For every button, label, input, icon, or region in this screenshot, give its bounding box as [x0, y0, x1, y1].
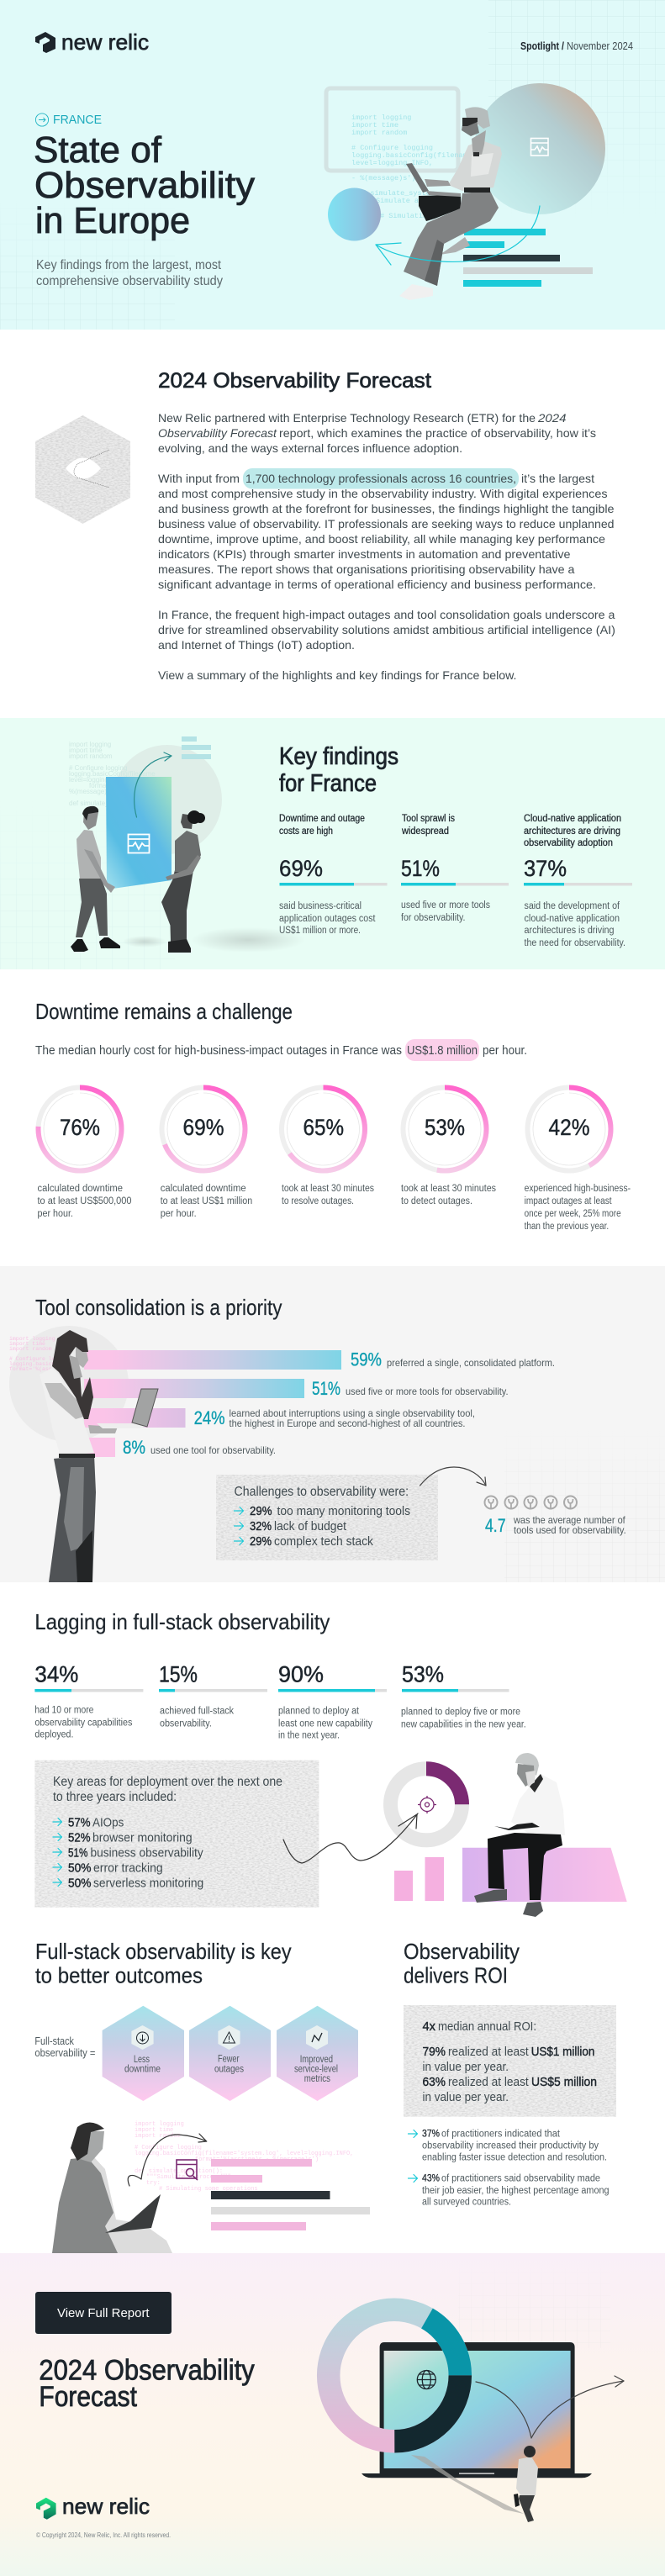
finding: cloud-native	[524, 814, 632, 948]
callout: key deployment areas	[34, 1760, 319, 1908]
faded code: format='%(asc	[9, 1366, 52, 1372]
sentence with highlight: The median hourly cost for high-business-impact outages in France was	[35, 1043, 402, 1058]
finding: downtime costs: said business-critical	[279, 901, 362, 911]
faded code: logging.basicConfig	[9, 1361, 71, 1367]
hexagon: fewer outages: outages	[214, 2065, 244, 2075]
icon: search window	[177, 2160, 198, 2180]
subtitle: comprehensive observability study	[36, 274, 223, 288]
donut stat: 69%: 69%	[183, 1115, 224, 1140]
man reading	[474, 1753, 565, 1917]
stat: 34%: deployed.	[34, 1730, 73, 1740]
body text: it’s the largest	[521, 472, 594, 485]
faded code: import logging	[9, 1336, 55, 1342]
callout: key deployment areas: 50%	[68, 1876, 91, 1890]
finding: tool sprawl: used five or more tools	[401, 900, 490, 911]
title: Observability	[34, 165, 255, 206]
hexagon: less downtime	[103, 2006, 184, 2101]
bullet: productivity	[409, 2130, 607, 2163]
heading: for France	[279, 770, 377, 797]
faded code	[135, 2121, 353, 2193]
stat: 90%	[278, 1661, 387, 1740]
donut stat: 76%: 76%	[60, 1115, 100, 1140]
icons: wrenches	[484, 1497, 577, 1508]
bullet: job easier: all surveyed countries.	[422, 2198, 511, 2208]
faded code: %(message)s')	[69, 788, 113, 795]
code window: import random	[351, 129, 407, 137]
heading: Key findings	[279, 743, 398, 770]
wavy arrow	[283, 1813, 418, 1863]
finding: tool sprawl: 51%	[401, 856, 440, 881]
faded code: import time	[135, 2127, 173, 2134]
callout: median ROI: in value per year.	[422, 2060, 509, 2074]
donut stat: 42%	[525, 1088, 631, 1232]
heading: Tool consolidation is a priority	[35, 1295, 282, 1320]
code window: - %(message)s')	[351, 174, 416, 182]
callout: challenges: too many monitoring tools	[277, 1504, 410, 1518]
callout: key deployment areas: Key areas for deployment over the next one	[53, 1775, 282, 1789]
callout: median ROI: 63%	[422, 2075, 446, 2089]
bar chart: 51%	[312, 1378, 340, 1399]
heading: to better outcomes	[35, 1962, 203, 1987]
gradient circle large	[474, 83, 605, 214]
hexagon: improved service-level metrics: metrics	[304, 2074, 330, 2084]
illustration: woman with laptop	[40, 1330, 158, 1582]
finding: cloud-native: the need for observability.	[525, 938, 625, 948]
body text: View a summary of the highlights and key findings for France below.	[158, 668, 516, 682]
heading: Full-stack observability is key	[35, 1939, 292, 1964]
code window: logging.basicConfig(filename=	[351, 151, 476, 160]
heading	[279, 743, 398, 797]
donut stat: 65%: took at least 30 minutes	[282, 1184, 374, 1194]
stat: 34%: 34%	[34, 1661, 78, 1687]
sentence with highlight	[35, 1039, 527, 1061]
finding: downtime costs: Downtime and outage	[279, 814, 365, 824]
faded code: import random	[135, 2133, 181, 2140]
donut stat: 65%: to resolve outages.	[282, 1196, 354, 1206]
finding: cloud-native: observability adoption	[524, 838, 613, 848]
donut stat: 76%	[37, 1088, 131, 1219]
faded code: # Simulating some operations	[159, 2186, 258, 2193]
donut stat: 53%: to detect outages.	[401, 1196, 472, 1206]
donut stat: 76%: per hour.	[37, 1209, 73, 1219]
donut ring	[329, 2309, 460, 2441]
faded code: level=logging.INFO,	[69, 776, 128, 784]
finding: cloud-native: cloud-native application	[525, 914, 620, 924]
callout: key deployment areas: browser monitoring	[92, 1830, 193, 1845]
gradient panel	[106, 777, 172, 889]
hexagon: improved service-level metrics: Improved	[300, 2055, 333, 2065]
bar chart: 8%	[123, 1437, 145, 1458]
donut stat: 69%: per hour.	[161, 1209, 197, 1219]
donut stat: 42%: experienced high-business-	[525, 1184, 631, 1194]
faded code: # Configure logging	[135, 2145, 202, 2151]
heading: Forecast	[39, 2381, 137, 2413]
finding: downtime costs: costs are high	[279, 826, 333, 837]
finding: cloud-native: architectures are driving	[524, 826, 620, 837]
body text: significant advantage in terms of operational efficiency and business performance.	[158, 578, 596, 591]
bar chart: the highest in Europe and second-highest of all countries.	[229, 1417, 466, 1429]
bullet: job easier: their job easier, the highest percentage among	[422, 2186, 609, 2196]
callout: median ROI: median annual ROI:	[438, 2019, 536, 2034]
faded code: # Configure logging	[69, 764, 127, 772]
stat: 53%	[401, 1661, 526, 1730]
donut stat: 42%: 42%	[548, 1115, 590, 1140]
code window: def simulate_system	[353, 189, 435, 198]
finding: cloud-native: Cloud-native application	[524, 814, 621, 824]
heading: Observability	[404, 1939, 520, 1964]
country tag: France: FRANCE	[53, 113, 102, 127]
faded code: import time	[69, 747, 103, 754]
body text: report, which examines the practice of observability, how it’s	[279, 426, 596, 440]
stat: 15%: achieved full-stack	[160, 1707, 234, 1717]
panel: tool consolidation	[0, 1266, 665, 1582]
faded code: import random	[69, 752, 113, 760]
body text: indicators (KPIs) through smarter investments in automation and preventative	[158, 547, 571, 561]
callout: challenges: lack of budget	[274, 1519, 347, 1533]
stat: 15%: 15%	[159, 1661, 198, 1687]
hero illustration	[326, 83, 605, 300]
callout: median ROI: realized at least	[448, 2045, 529, 2059]
woman	[161, 810, 205, 953]
bar chart: learned about interruptions using a single observability tool,	[229, 1407, 475, 1419]
faded code: import logging	[135, 2121, 184, 2128]
bullet: job easier: of practitioners said observability made	[441, 2174, 600, 2184]
bullet: job easier: 43%	[422, 2174, 440, 2184]
illustration: two people carrying panel	[69, 736, 305, 953]
panel: hero	[0, 0, 665, 330]
stat: 53%: new capabilities in the new year.	[401, 1720, 526, 1730]
faded code: format	[89, 782, 108, 789]
equation label: Full-stack	[34, 2035, 75, 2047]
title: State of	[34, 129, 162, 171]
bullet: productivity: of practitioners indicated that	[441, 2130, 561, 2140]
body text: New Relic partnered with Enterprise Technology Research (ETR) for the	[158, 411, 536, 425]
callout: challenges: 29%	[250, 1504, 272, 1518]
callout: key deployment areas: business observability	[91, 1845, 203, 1860]
body text: drive for streamlined observability solutions amidst ambitious artificial intelligence (AI)	[158, 623, 615, 636]
code window	[326, 88, 476, 220]
finding: downtime costs	[279, 814, 387, 936]
donut stat: 76%: calculated downtime	[37, 1184, 123, 1194]
faded code: try:	[146, 2180, 161, 2187]
code window: # Configure logging	[351, 144, 433, 152]
callout: challenges: 29%	[250, 1534, 272, 1549]
icon: eye hexagon	[35, 415, 130, 524]
callout: key deployment areas: 52%	[68, 1830, 91, 1845]
body text: measures. The report shows that organisations prioritising observability have a	[158, 562, 575, 576]
heading: Downtime remains a challenge	[35, 999, 293, 1024]
bar chart: 24%	[194, 1407, 225, 1428]
code window: import logging	[351, 113, 411, 122]
stat: average tools: tools used for observability.	[514, 1524, 626, 1536]
donut stat: 65%: 65%	[303, 1115, 344, 1140]
donut stat: 69%: calculated downtime	[161, 1184, 246, 1194]
panel: downtime	[35, 999, 631, 1232]
stat: 34%	[34, 1661, 143, 1740]
title: in Europe	[35, 200, 190, 241]
body text: downtime, improve uptime, and boost reliability, all while managing key performance	[158, 532, 605, 546]
icon: target eye	[418, 1796, 436, 1813]
heading: delivers ROI	[404, 1962, 508, 1987]
sentence with highlight: US$1.8 million	[407, 1043, 478, 1058]
finding: downtime costs: application outages cost	[279, 914, 376, 924]
small pink bars	[394, 1857, 444, 1901]
code window: level=logging.INFO,	[351, 159, 433, 167]
title	[34, 129, 255, 241]
faded code: logging.basicConfig(filename	[69, 770, 156, 778]
button: View Full Report	[57, 2306, 150, 2320]
bar chart: used five or more tools for observability.	[346, 1386, 508, 1397]
faded code	[9, 1336, 71, 1372]
body text: 1,700 technology professionals across 16 countries,	[245, 472, 516, 485]
faded code: def simulate_operation():	[135, 2168, 223, 2175]
stat: 90%: planned to deploy at	[278, 1707, 360, 1717]
heading	[39, 2355, 255, 2413]
stat: 90%: in the next year.	[278, 1730, 340, 1740]
logo: new relic green: new relic	[62, 2494, 150, 2519]
stat: average tools: 4.7	[485, 1515, 506, 1536]
finding: tool sprawl: for observability.	[401, 913, 466, 923]
arrow	[476, 2376, 624, 2438]
arrow	[420, 1467, 486, 1486]
donut stat: 53%: 53%	[425, 1115, 465, 1140]
bar chart: 59%	[351, 1349, 382, 1370]
faded code	[69, 741, 156, 807]
callout: key deployment areas: error tracking	[93, 1861, 163, 1875]
callout: key deployment areas: 51%	[68, 1845, 87, 1860]
background circle	[9, 1326, 129, 1442]
gradient circle small	[328, 188, 381, 240]
equation label	[34, 2035, 95, 2059]
person with laptop	[399, 107, 502, 300]
body text: and business growth at the forefront for businesses, the findings highlight the tangible	[158, 502, 615, 515]
donut stat: 53%	[401, 1088, 496, 1206]
callout: median ROI: in value per year.	[422, 2090, 509, 2104]
small bars	[182, 736, 211, 759]
pink platform	[462, 1848, 627, 1902]
code window: Simulate a	[376, 197, 419, 205]
stat: 15%	[159, 1661, 267, 1729]
illustration: laptop and donut	[329, 2309, 624, 2522]
callout: challenges: 32%	[250, 1519, 272, 1533]
arrow	[135, 752, 172, 817]
callout: median ROI: 79%	[422, 2045, 446, 2059]
illustration: donut	[390, 1769, 462, 1840]
hexagon: fewer outages	[189, 2006, 271, 2101]
code window: # Simulating	[380, 212, 431, 220]
stat: 34%: had 10 or more	[34, 1705, 93, 1715]
stat: 90%: 90%	[278, 1661, 324, 1687]
donut stat: 53%: took at least 30 minutes	[401, 1184, 496, 1194]
laptop	[362, 2342, 592, 2478]
faded code: import time	[9, 1341, 45, 1347]
icon: dashboard window	[128, 834, 150, 853]
heading	[35, 1939, 292, 1987]
hexagon: improved service-level metrics: service-level	[294, 2065, 338, 2075]
panel: forecast intro	[35, 369, 615, 682]
finding: downtime costs: US$1 million or more.	[279, 926, 361, 936]
stacked bars	[463, 229, 593, 287]
finding: cloud-native: said the development of	[525, 901, 620, 911]
faded code: # Configure logging	[9, 1356, 71, 1362]
hexagon: fewer outages: Fewer	[218, 2055, 240, 2065]
stat: 15%: observability.	[160, 1718, 212, 1729]
stat: 34%: observability capabilities	[34, 1718, 133, 1729]
callout: challenges	[216, 1475, 438, 1560]
stat: average tools	[485, 1514, 626, 1536]
copyright: © Copyright 2024, New Relic, Inc. All rights reserved.	[36, 2531, 171, 2539]
donut stat: 42%: than the previous year.	[525, 1222, 609, 1232]
button	[35, 2292, 172, 2334]
faded code: import random	[9, 1346, 52, 1352]
bar chart: used one tool for observability.	[150, 1444, 276, 1456]
stat: 90%: least one new capability	[278, 1718, 372, 1729]
finding: downtime costs: 69%	[279, 856, 323, 881]
panel: lagging	[34, 1609, 627, 1917]
callout: median ROI	[404, 2005, 616, 2117]
subtitle: Key findings from the largest, most	[36, 258, 222, 272]
body text	[158, 411, 615, 682]
donut stat: 42%: impact outages at least	[525, 1196, 612, 1206]
faded code: import logging	[69, 741, 111, 748]
sentence with highlight: per hour.	[483, 1043, 527, 1058]
callout: key deployment areas: 57%	[68, 1815, 91, 1829]
faded code: def simulate_system	[69, 800, 130, 807]
finding: cloud-native: architectures is driving	[525, 926, 614, 936]
code window: import time	[351, 121, 398, 129]
date label: November 2024	[567, 40, 633, 52]
faded code: logging.basicConfig(filename='system.log', level=logging.INFO,	[135, 2151, 353, 2157]
callout: key deployment areas: to three years included:	[53, 1790, 177, 1804]
donut stat: 65%	[282, 1088, 374, 1206]
panel: footer	[0, 2253, 665, 2576]
callout: median ROI: realized at least	[448, 2075, 529, 2089]
logo: new relic: new relic	[61, 29, 149, 55]
body text: 2024	[537, 411, 567, 425]
donut stat: 69%	[161, 1088, 252, 1219]
heading: Lagging in full-stack observability	[34, 1609, 330, 1634]
body text: business value of observability. IT professionals are seeking ways to reduce unplanned	[158, 517, 614, 531]
panel: full-stack outcomes	[34, 1939, 370, 2253]
finding: tool sprawl: Tool sprawl is	[402, 814, 455, 824]
equation label: observability =	[34, 2047, 95, 2059]
body text: and Internet of Things (IoT) adoption.	[158, 638, 355, 652]
date label	[520, 40, 633, 52]
illustration: woman with laptop	[52, 2122, 172, 2253]
hexagon: improved service-level metrics	[277, 2006, 358, 2101]
body text: Observability Forecast	[158, 426, 277, 440]
body text: With input from	[158, 472, 240, 485]
bullet: job easier	[409, 2174, 609, 2208]
donut stat: 69%: to at least US$1 million	[161, 1196, 252, 1206]
heading: 2024 Observability	[39, 2355, 255, 2387]
callout: key deployment areas: 50%	[68, 1861, 91, 1875]
body text: and most comprehensive study in the observability industry. With digital experiences	[158, 487, 607, 500]
stat: 53%: planned to deploy five or more	[401, 1707, 520, 1717]
donut stat: 42%: once per week, 25% more	[525, 1209, 621, 1219]
callout: median ROI: US$1 million	[531, 2045, 594, 2059]
finding: tool sprawl	[401, 814, 509, 923]
faded code: format='%(asctime)s - %(message)s')	[195, 2156, 319, 2163]
bullet: productivity: enabling faster issue detection and resolution.	[422, 2153, 607, 2163]
callout: median ROI: 4x	[422, 2019, 435, 2034]
panel: key findings	[0, 718, 665, 969]
bullet: productivity: observability increased their productivity by	[422, 2141, 599, 2151]
callout: median ROI: US$5 million	[531, 2075, 597, 2089]
icon: dashboard window	[531, 138, 548, 156]
callout: key deployment areas: AIOps	[92, 1815, 124, 1829]
faded code: """Simulate a process"""	[146, 2174, 231, 2181]
body text: In France, the frequent high-impact outages and tool consolidation goals underscore a	[158, 608, 615, 621]
heading	[404, 1939, 520, 1987]
heading: 2024 Observability Forecast	[158, 369, 431, 393]
hexagon: less downtime: Less	[134, 2055, 150, 2065]
subtitle	[36, 258, 223, 288]
bar chart: preferred a single, consolidated platform.	[387, 1357, 555, 1369]
callout: challenges: complex tech stack	[274, 1534, 373, 1549]
callout: key deployment areas: serverless monitoring	[93, 1876, 203, 1890]
bars	[211, 2159, 370, 2230]
finding: tool sprawl: widespread	[401, 826, 449, 837]
icon: globe	[417, 2371, 435, 2389]
highlight pill	[243, 468, 519, 489]
arrow	[376, 206, 540, 265]
hexagon: less downtime: downtime	[124, 2065, 161, 2075]
date label: Spotlight /	[520, 40, 564, 52]
stat: average tools: was the average number of	[513, 1514, 625, 1526]
bar chart	[84, 1349, 555, 1458]
callout: challenges: Challenges to observability were:	[234, 1485, 409, 1499]
walking man with shadow	[411, 2446, 538, 2522]
stat: 53%: 53%	[402, 1661, 444, 1687]
finding: cloud-native: 37%	[524, 856, 567, 881]
donut stat: 76%: to at least US$500,000	[37, 1196, 131, 1206]
panel: ROI	[404, 1939, 616, 2208]
body text: evolving, and the ways external forces influence adoption.	[158, 441, 462, 455]
man	[71, 806, 120, 952]
bullet: productivity: 37%	[422, 2130, 440, 2140]
loop arrow	[128, 2134, 207, 2186]
